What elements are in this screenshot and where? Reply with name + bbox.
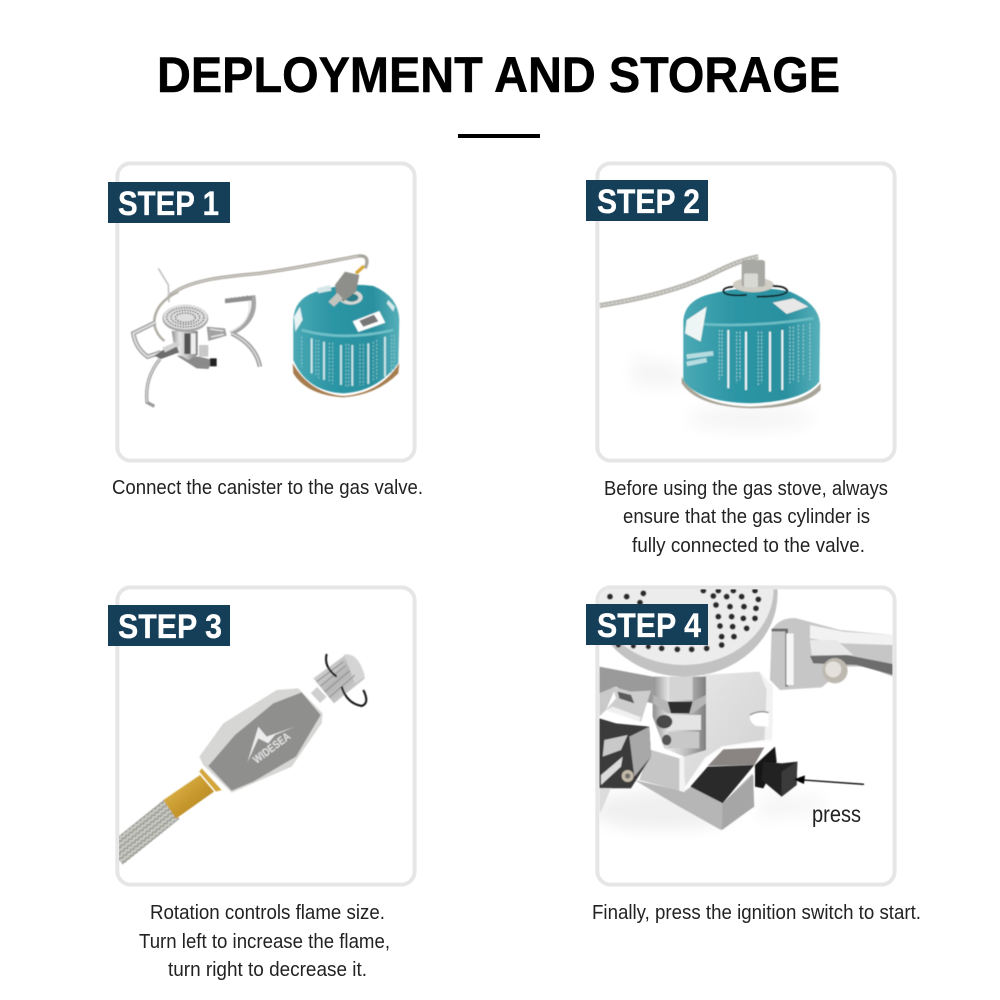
caption: step 3 (139, 902, 390, 981)
caption: step 1: Connect the canister to the gas valve. (112, 477, 423, 499)
panel: step 3 (108, 587, 415, 885)
caption: step 3: Turn left to increase the flame, (139, 931, 390, 953)
photo: valve knob and braided hose (115, 654, 366, 855)
clip (606, 687, 651, 722)
caption: step 4: Finally, press the ignition switch to start. (592, 902, 921, 924)
photo: stove and canister (133, 256, 399, 406)
title: DEPLOYMENT AND STORAGE (157, 47, 840, 103)
caption: step 2: fully connected to the valve. (632, 535, 865, 557)
lower block (634, 773, 754, 830)
front block (639, 750, 680, 790)
left mechanism (599, 718, 651, 788)
arrow (803, 780, 864, 784)
caption: step 3: turn right to decrease it. (168, 959, 367, 981)
caption: step 2: Before using the gas stove, always (604, 478, 888, 500)
photo: valve knob and braided hose: WIDESEA (251, 731, 293, 766)
panel: step 4 (586, 586, 896, 886)
caption: step 3: Rotation controls flame size. (150, 902, 385, 924)
stove drawn with crop offset (133, 268, 260, 406)
badge: step 4: STEP 4 (597, 607, 701, 645)
badge: step 3: STEP 3 (118, 608, 222, 646)
panel: step 2 (586, 163, 895, 461)
photo: canister with connected valve (599, 257, 821, 432)
right bracket (770, 618, 893, 690)
badge: step 2: STEP 2 (597, 183, 700, 221)
caption: step 2: ensure that the gas cylinder is (623, 506, 870, 528)
ignition button (755, 747, 777, 788)
central tube (653, 677, 706, 757)
badge: step 1: STEP 1 (118, 185, 219, 223)
right plate (683, 672, 773, 788)
wedge (690, 765, 754, 803)
canister (293, 363, 399, 397)
photo: igniter close-up (599, 589, 893, 830)
label: press: press (812, 801, 861, 827)
caption: step 2 (604, 478, 888, 557)
left upper plate (599, 667, 653, 703)
burner (591, 510, 778, 677)
panel: step 1 (108, 163, 415, 461)
